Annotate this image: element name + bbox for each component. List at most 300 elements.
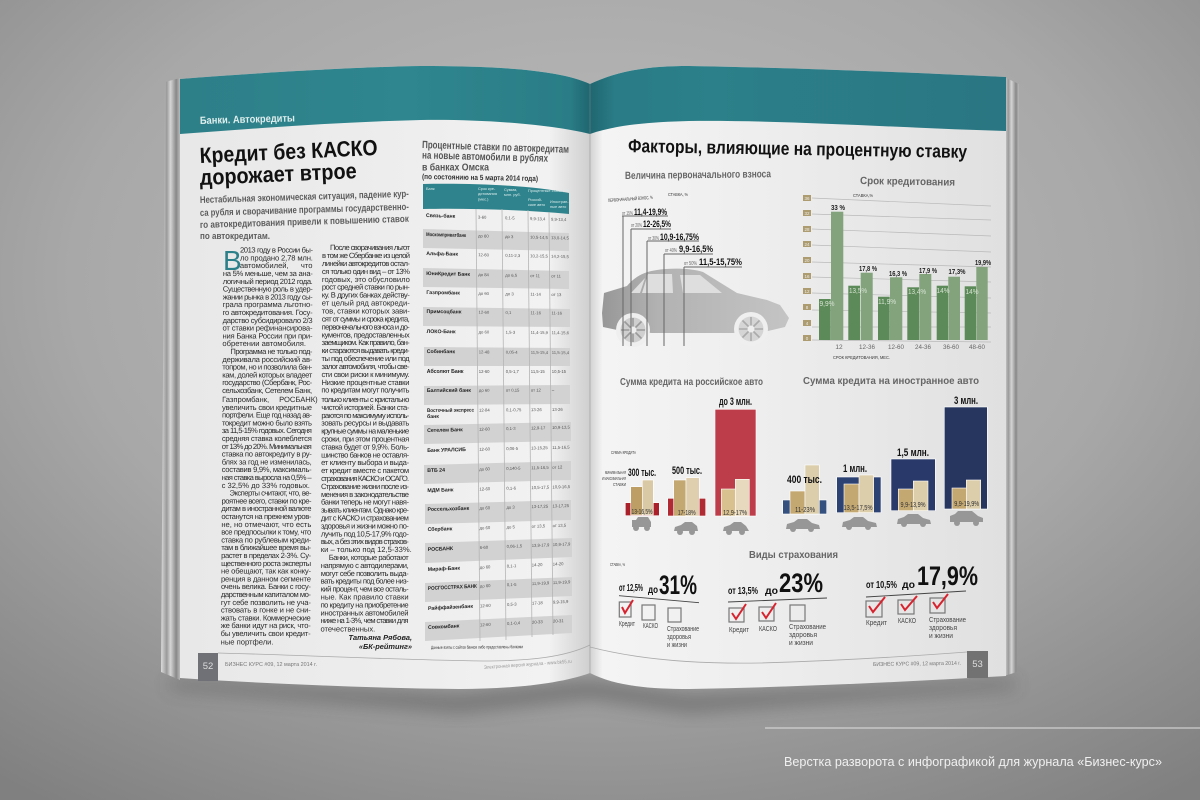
y axis labels: 16 bbox=[804, 274, 810, 279]
rate labels: от 50% bbox=[684, 261, 697, 267]
article column 2: Страхование жизни после из- bbox=[321, 482, 410, 491]
car icons bbox=[632, 517, 749, 535]
article column 1: Существенную роль в удер- bbox=[223, 285, 313, 294]
table rows: 12-84 bbox=[479, 407, 490, 413]
table header labels: (мес.) bbox=[478, 196, 489, 202]
table rows: 13-26 bbox=[531, 407, 542, 412]
article column 1: с 32,5% до 33% годовых. bbox=[222, 481, 310, 490]
table rows: до 84 bbox=[478, 272, 490, 277]
article column 1: ставка по рублевым креди- bbox=[221, 535, 312, 544]
table rows: 14-20 bbox=[532, 562, 543, 568]
table rows: Связь-банк bbox=[426, 212, 456, 220]
article column 2: могут себе позволить выда- bbox=[321, 569, 409, 578]
axis captions: СТАВКА,% bbox=[853, 193, 873, 198]
insurance option 3: 17,9% bbox=[917, 561, 978, 591]
grid lines bbox=[812, 198, 991, 342]
amount labels: 1,5 млн. bbox=[897, 447, 929, 459]
axis captions: ПЕРВОНАЧАЛЬНЫЙ ВЗНОС, % bbox=[608, 193, 653, 203]
article title bbox=[199, 135, 378, 190]
article column 1: блях за год не изменилась, bbox=[222, 457, 312, 466]
article column 1: останутся на прежнем уров- bbox=[221, 512, 312, 521]
article column 1: токредит можно было взять bbox=[222, 418, 312, 427]
amount labels: 500 тыс. bbox=[672, 465, 702, 477]
article column 1: дитам в иностранной валюте bbox=[221, 504, 311, 513]
table rows: Райффайзенбанк bbox=[428, 603, 473, 612]
article title: дорожает втрое bbox=[199, 158, 357, 190]
rate labels: от 15% bbox=[622, 211, 633, 217]
table rows: 1,5-3 bbox=[506, 330, 516, 335]
panel: right page bbox=[590, 66, 1006, 689]
table rows: банк bbox=[427, 413, 439, 420]
table rows: 14-20 bbox=[553, 561, 564, 567]
article column 2: линейки автокредитов остал- bbox=[322, 259, 410, 268]
bar inner labels: 11,9% bbox=[878, 299, 896, 306]
page number 52 bbox=[198, 653, 218, 681]
table rows: 10,9-17,9 bbox=[553, 541, 571, 547]
article column 1: ные портфели. bbox=[221, 638, 274, 646]
y axis labels: 32 bbox=[804, 211, 810, 216]
article column 1: РОСБАНК) bbox=[279, 395, 318, 404]
article column 1: грала программа льготно- bbox=[223, 300, 313, 309]
insurance option 2: здоровья bbox=[789, 630, 817, 639]
rate labels: 10,9-16,75% bbox=[660, 232, 699, 243]
amount labels: до 3 млн. bbox=[719, 396, 752, 408]
article column 2: ет кредит вместе с пакетом bbox=[321, 466, 409, 475]
table rows: 6-60 bbox=[480, 545, 489, 550]
bar value labels: 19,9% bbox=[975, 260, 992, 267]
article column 1: же банки идут на риск, что- bbox=[221, 621, 311, 630]
page number 53: 53 bbox=[972, 659, 983, 670]
article column 2: ки – только под 12,5-33%. bbox=[321, 545, 412, 554]
table header labels: Срок кре- bbox=[478, 186, 496, 191]
article column 1: гут себе позволить не уча- bbox=[221, 598, 311, 607]
insurance option 2: 23% bbox=[779, 568, 823, 598]
table rows: до 6,5 bbox=[505, 273, 518, 278]
article column 2 bbox=[320, 243, 413, 634]
table rows: от 11 bbox=[530, 273, 541, 278]
insurance section bbox=[610, 549, 978, 649]
table rows: 0,06-5 bbox=[506, 446, 519, 451]
article column 2: ет клиенту выбора и выда- bbox=[321, 458, 410, 467]
table rows: Собинбанк bbox=[427, 348, 455, 355]
table rows: 0,5-3 bbox=[507, 601, 517, 607]
rate labels: от 40% bbox=[665, 248, 677, 254]
article column 1: средняя ставка колеблется bbox=[222, 434, 312, 443]
insurance option 2: Страхование bbox=[789, 622, 826, 631]
table rows: 9,9-13,4 bbox=[530, 216, 546, 221]
table rows: до 3 bbox=[505, 291, 514, 296]
y axis labels bbox=[803, 195, 811, 341]
table rows: ЮниКредит Банк bbox=[426, 271, 470, 278]
table rows: 14,2-15,5 bbox=[551, 254, 570, 259]
table rows: 11,5-16,5 bbox=[552, 445, 570, 450]
article column 2: чистой историей. Банки ста- bbox=[321, 403, 410, 412]
table header labels: Процентные ставки, % bbox=[528, 188, 570, 193]
table rows: МДМ Банк bbox=[427, 487, 454, 494]
article column 1: государство (Сбербанк, Рос- bbox=[222, 378, 313, 387]
table header bbox=[423, 184, 569, 214]
table rows: от 12 bbox=[552, 464, 563, 470]
article column 1: очень велика. Банки с госу- bbox=[221, 582, 311, 591]
bar inner labels: 13,4% bbox=[908, 289, 926, 296]
x axis labels: 48-60 bbox=[969, 344, 985, 351]
article byline: «БК-рейтинг» bbox=[359, 642, 412, 651]
left footer text: БИЗНЕС КУРС #09, 12 марта 2014 г. bbox=[225, 662, 317, 668]
rate labels bbox=[632, 509, 747, 517]
article column 1: кам, долей которых владеет bbox=[222, 370, 313, 379]
table rows: 11,5-15,4 bbox=[531, 350, 549, 355]
table: rates by bank bbox=[423, 184, 572, 650]
table rows: 11,4-15,9 bbox=[531, 330, 549, 335]
article column 2: ниже на 1-3%, чем ставки для bbox=[320, 616, 409, 625]
article column 2: первоначального взноса и до- bbox=[322, 322, 410, 331]
insurance option 3: и жизни bbox=[929, 631, 953, 640]
article column 2: вать кредиты под более низ- bbox=[321, 577, 409, 586]
insurance option 1: Кредит bbox=[619, 619, 635, 628]
article lead: са рубля и сворачивание программы государственно- bbox=[200, 202, 409, 219]
table rows: 10,5-15 bbox=[552, 369, 567, 374]
x axis labels: 12-60 bbox=[888, 344, 904, 351]
insurance option 3 bbox=[866, 561, 978, 640]
table rows: от 12 bbox=[531, 388, 542, 393]
table heading: на новые автомобили в рублях bbox=[422, 150, 548, 165]
bar inner labels: 9,9% bbox=[820, 301, 834, 308]
bar inner labels: 14% bbox=[936, 288, 950, 295]
x axis labels: 36-60 bbox=[943, 344, 959, 351]
drop cap: В bbox=[223, 245, 242, 276]
table rows: 0,1-5 bbox=[505, 215, 515, 221]
table rows: 12-60 bbox=[478, 252, 490, 257]
insurance option 2: КАСКО bbox=[759, 624, 777, 633]
article column 1: Программа не только под- bbox=[230, 347, 313, 356]
captions: СУММА КРЕДИТА bbox=[611, 450, 637, 455]
article lead: Нестабильная экономическая ситуация, падение кур- bbox=[200, 189, 409, 206]
rate labels: 11,5-15,75% bbox=[699, 257, 742, 268]
article column 2: ки стараются выдавать креди- bbox=[322, 346, 410, 355]
left teal band bbox=[180, 66, 590, 134]
table rows: Банк УРАЛСИБ bbox=[427, 447, 466, 454]
table header labels bbox=[426, 186, 570, 209]
article column 2: тов, ставки которых зави- bbox=[322, 307, 410, 316]
article column 2: сти свои риски к минимуму. bbox=[321, 370, 410, 379]
article column 1: там в ближайшее время вы- bbox=[221, 543, 312, 552]
table rows: 12-60 bbox=[478, 310, 490, 315]
axis captions: СТАВКА, % bbox=[668, 192, 688, 197]
chart: foreign car loan bbox=[783, 375, 987, 532]
captions: СТАВКИ bbox=[613, 482, 626, 487]
table rows: 12-60 bbox=[479, 426, 490, 432]
table heading: в банках Омска bbox=[422, 162, 489, 174]
table rows: Совкомбанк bbox=[428, 622, 460, 631]
table grey rows bbox=[423, 229, 572, 641]
table column rules bbox=[476, 209, 553, 641]
table rows: 12-60 bbox=[480, 603, 491, 608]
article column 2: сроки, при этом процентная bbox=[321, 435, 409, 444]
table rows: 20-31 bbox=[553, 618, 564, 624]
bars bbox=[783, 407, 987, 514]
table rows: до 3 bbox=[505, 234, 514, 239]
insurance option 1: КАСКО bbox=[643, 621, 658, 630]
insurance option 2: Кредит bbox=[729, 625, 749, 634]
page number 52: 52 bbox=[203, 661, 213, 672]
article lead: по автокредитам. bbox=[200, 231, 270, 242]
table rows: 0,1-3 bbox=[506, 426, 516, 431]
page number 53 bbox=[967, 651, 988, 678]
chart: russian car loan bbox=[602, 376, 763, 535]
article column 2: раются по максимуму исполь- bbox=[321, 411, 410, 420]
article column 2: ся только один вид – от 13% bbox=[322, 267, 410, 276]
left footer rule bbox=[218, 645, 590, 661]
table rows: 0,140-5 bbox=[506, 466, 521, 471]
bar inner labels: 13,5% bbox=[849, 288, 867, 295]
article lead bbox=[200, 189, 409, 242]
article column 1: увеличить свои кредитные bbox=[222, 403, 312, 412]
article column 2: После сворачивания льгот bbox=[330, 243, 411, 252]
y axis labels: 24 bbox=[804, 242, 810, 247]
article column 1: ставка по автокредиту в ру- bbox=[222, 450, 312, 459]
y axis labels: 36 bbox=[804, 196, 810, 201]
article column 2: в том же Сбербанке из целой bbox=[322, 251, 410, 260]
table rows: Мираф-Банк bbox=[428, 565, 460, 573]
chart: down payment bbox=[602, 168, 789, 347]
table rows: 12-48 bbox=[479, 349, 490, 355]
article column 1: дарственным капиталом мо- bbox=[221, 590, 311, 599]
article column 1: обретении автомобиля. bbox=[222, 339, 306, 348]
caption: Верстка разворота с инфографикой для журнала «Бизнес-курс» bbox=[784, 755, 1162, 769]
table rows: 20-33 bbox=[532, 619, 543, 625]
table rows: от 0,15 bbox=[506, 388, 520, 393]
x axis labels: 12 bbox=[835, 344, 843, 351]
article column 1: ло продано 2,78 млн. bbox=[240, 253, 313, 262]
article column 1: автомобилей, bbox=[240, 261, 289, 270]
article column 2: Банки, которые работают bbox=[329, 553, 409, 562]
y axis labels: 12 bbox=[804, 289, 810, 294]
table rows: 0,11-2,3 bbox=[505, 253, 521, 258]
article column 1: не, но отмечают, что есть bbox=[221, 520, 311, 529]
article column 1: держивала российский ав- bbox=[222, 355, 313, 364]
right teal band bbox=[590, 66, 1006, 134]
rate labels: 12-26,5% bbox=[643, 219, 671, 230]
table rows: до 60 bbox=[480, 505, 491, 511]
rate labels: 11-23% bbox=[795, 507, 815, 514]
table rows: 11,5-15 bbox=[531, 369, 545, 374]
table rows: до 60 bbox=[478, 291, 490, 296]
table rows: Восточный экспресс bbox=[427, 407, 474, 414]
y axis labels: 28 bbox=[804, 227, 810, 232]
article column 2: ставка будет от 9,9%. Боль- bbox=[321, 442, 410, 451]
table rows: Москомприватбанк bbox=[426, 231, 466, 239]
insurance option 1: от 12,5% bbox=[619, 583, 643, 594]
amount labels: 300 тыс. bbox=[628, 467, 656, 479]
article column 2: шинство банков не оставля- bbox=[321, 450, 410, 459]
insurance option 1: 31% bbox=[659, 570, 697, 600]
article column 1: растет в пределах 2-3%. Су- bbox=[221, 551, 312, 560]
article column 1: на 5% меньше, чем за ана- bbox=[223, 269, 313, 278]
table rows: 0,5-1,7 bbox=[506, 369, 520, 374]
caption rule bbox=[765, 728, 1200, 729]
article column 1: все предпосылки к тому, что bbox=[221, 528, 311, 537]
rate labels: 9,9-19,9% bbox=[954, 501, 979, 508]
rate labels bbox=[795, 501, 979, 514]
article column 2: крупные суммы на маленькие bbox=[321, 427, 409, 436]
article column 1: го автокредитования. Госу- bbox=[223, 308, 313, 317]
section label: Банки. Автокредиты bbox=[200, 112, 295, 127]
bars bbox=[625, 409, 756, 516]
article column 2: зывать клиентам. Однако кре- bbox=[321, 506, 409, 515]
insurance option 3: Кредит bbox=[866, 618, 887, 627]
table source note: Данные взяты с сайтов банков либо предоставлены банками bbox=[431, 643, 523, 650]
article column 1: от 13% до 20%. Минимальная bbox=[222, 442, 312, 451]
amount labels: 1 млн. bbox=[843, 463, 867, 475]
table rows: 11-16 bbox=[530, 310, 542, 315]
bar inner labels: 14% bbox=[966, 289, 978, 296]
insurance option 3: Страхование bbox=[929, 615, 966, 624]
article column 2: отечественных. bbox=[320, 625, 375, 634]
table header labels: млн. руб. bbox=[504, 192, 521, 197]
table header labels: Иностран- bbox=[550, 199, 569, 204]
article column 1: дарство субсидировало 2/3 bbox=[223, 316, 313, 325]
article column 2: страхования КАСКО и ОСАГО. bbox=[321, 474, 409, 483]
insurance option 3: от 10,5% bbox=[866, 580, 897, 591]
table rows: 11-16 bbox=[552, 311, 563, 316]
article column 1: сельхозбанк, Сетелем Банк, bbox=[222, 386, 312, 395]
bar value labels bbox=[831, 205, 992, 278]
car icons bbox=[786, 511, 983, 532]
article column 1: ренция в данном сегменте bbox=[221, 574, 311, 583]
chart title: Сумма кредита на иностранное авто bbox=[803, 375, 979, 387]
axis captions bbox=[833, 193, 890, 360]
insurance option 1: до bbox=[648, 585, 658, 596]
article column 1: составив 9,9%, максималь- bbox=[222, 465, 312, 474]
article column 1 bbox=[221, 246, 319, 646]
rate labels: 12,9-17% bbox=[723, 510, 747, 517]
x axis labels: 24-36 bbox=[915, 344, 931, 351]
article column 2: напрямую с автодилерами, bbox=[321, 561, 409, 570]
table rows: от 13,5 bbox=[532, 523, 546, 529]
article column 2: менения в законодательстве bbox=[321, 490, 409, 499]
insurance option 2: от 13,5% bbox=[728, 586, 758, 597]
table rows: 10,5-17,5 bbox=[531, 485, 550, 490]
bar value labels: 17,8 % bbox=[859, 266, 878, 273]
table rows: Россельхозбанк bbox=[428, 505, 470, 513]
article column 2: ные. Как правило ставки bbox=[321, 593, 409, 602]
rate labels: от 20% bbox=[631, 223, 642, 229]
table rows: 11,9-19,9 bbox=[553, 579, 571, 585]
insurance option 2 bbox=[728, 568, 827, 647]
book shadow bbox=[170, 680, 1015, 712]
table rows: от 13 bbox=[551, 292, 562, 297]
table rows: 12,9-17 bbox=[531, 425, 546, 431]
chart title: Величина первоначального взноса bbox=[625, 168, 771, 182]
table rows: 11-14 bbox=[530, 292, 541, 297]
amount labels bbox=[787, 395, 978, 486]
rate labels: 9,9-13,9% bbox=[900, 502, 926, 509]
left page sheet bbox=[180, 66, 590, 689]
article column 1: роятнее всего, ставки по кре- bbox=[221, 496, 312, 505]
y axis labels: 20 bbox=[804, 258, 810, 263]
right page sheet bbox=[590, 66, 1006, 689]
table rows: 0,1-1 bbox=[507, 563, 517, 569]
article column 1: от ставки рефинансирова- bbox=[223, 324, 313, 333]
rate labels: 13,5-17,5% bbox=[844, 505, 872, 512]
article column 1: ния Банка России при при- bbox=[222, 331, 313, 340]
table rows: Сетелем Банк bbox=[427, 427, 463, 434]
article column 2: заемщиком. Как правило, бан- bbox=[322, 338, 410, 347]
table header labels: дитования bbox=[478, 191, 497, 196]
bar value labels: 33 % bbox=[831, 205, 846, 212]
table rows: 10,2-15,5 bbox=[530, 253, 549, 259]
table rows: 11,5-15,4 bbox=[552, 350, 570, 355]
table rows: до 60 bbox=[479, 329, 490, 335]
table rows: до 60 bbox=[480, 564, 491, 570]
table rows: 12-60 bbox=[480, 622, 491, 627]
amount labels: 3 млн. bbox=[954, 395, 978, 407]
article column 2: кий процент, чем все осталь- bbox=[321, 585, 409, 594]
bar value labels: 17,3% bbox=[948, 269, 966, 276]
table rows: 13-15,25 bbox=[531, 445, 548, 451]
amount labels bbox=[628, 396, 752, 479]
insurance option 1: и жизни bbox=[667, 640, 687, 649]
panel: left page bbox=[180, 66, 590, 689]
rate labels: 11,4-19,9% bbox=[634, 207, 667, 218]
article column 2: кументов, предоставленных bbox=[322, 330, 410, 339]
chart: loan term bbox=[803, 175, 992, 360]
y axis labels: 4 bbox=[806, 321, 809, 326]
table rows: РОСБАНК bbox=[428, 546, 454, 553]
article column 2: сят от суммы и срока кредита, bbox=[322, 314, 410, 323]
article column 1: Газпромбанк, bbox=[222, 395, 269, 404]
chart title: Срок кредитования bbox=[860, 175, 955, 189]
table rows: 12-60 bbox=[479, 486, 491, 492]
rate labels: 17-18% bbox=[678, 510, 696, 517]
insurance option 1 bbox=[619, 570, 699, 649]
table rows: 13-17,25 bbox=[532, 504, 549, 509]
article byline: Татьяна Рябова, bbox=[349, 633, 412, 642]
section title: Виды страхования bbox=[749, 549, 838, 561]
article column 2: ку. В других банках действу- bbox=[322, 291, 410, 300]
article column 1: что bbox=[301, 261, 313, 270]
table rows: до 3 bbox=[506, 505, 515, 510]
table rows: до 60 bbox=[479, 466, 491, 472]
article column 1: 2013 году в России бы- bbox=[240, 246, 313, 254]
captions: И МАКСИМАЛЬНАЯ bbox=[602, 476, 626, 481]
article column 2: здоровья и жизни можно по- bbox=[321, 521, 409, 530]
insurance option 3: здоровья bbox=[929, 623, 957, 632]
table rows: 10,9-13,5 bbox=[552, 425, 570, 430]
table rows: Газпромбанк bbox=[426, 289, 460, 297]
table rows: до 60 bbox=[479, 388, 490, 393]
insurance option 3: до bbox=[902, 580, 915, 591]
table rows: Сбербанк bbox=[428, 525, 453, 533]
table rows: до 60 bbox=[480, 525, 491, 530]
article column 1: за 11,5-15% годовых. Сегодня bbox=[222, 426, 312, 435]
axis captions: СРОК КРЕДИТОВАНИЯ, МЕС. bbox=[833, 355, 890, 360]
rate labels: 9,9-16,5% bbox=[679, 244, 713, 255]
x axis labels bbox=[835, 344, 985, 351]
article column 1: ная ставка выросла на 0,5% – bbox=[222, 473, 312, 482]
table rows: до 60 bbox=[480, 583, 491, 589]
article column 1: не обещают, так как конку- bbox=[221, 567, 312, 576]
x axis labels: 12-36 bbox=[859, 344, 875, 351]
amount labels: 400 тыс. bbox=[787, 474, 822, 486]
table rows: до 60 bbox=[478, 233, 489, 239]
captions: МИНИМАЛЬНАЯ bbox=[605, 470, 626, 475]
right footer rule bbox=[590, 647, 967, 663]
article column 2: залог автомобиля, чтобы све- bbox=[322, 362, 410, 371]
table heading bbox=[422, 139, 569, 183]
insurance option 2: до bbox=[765, 586, 778, 597]
article column 2: зовать ресурсы и выдавать bbox=[321, 419, 409, 428]
